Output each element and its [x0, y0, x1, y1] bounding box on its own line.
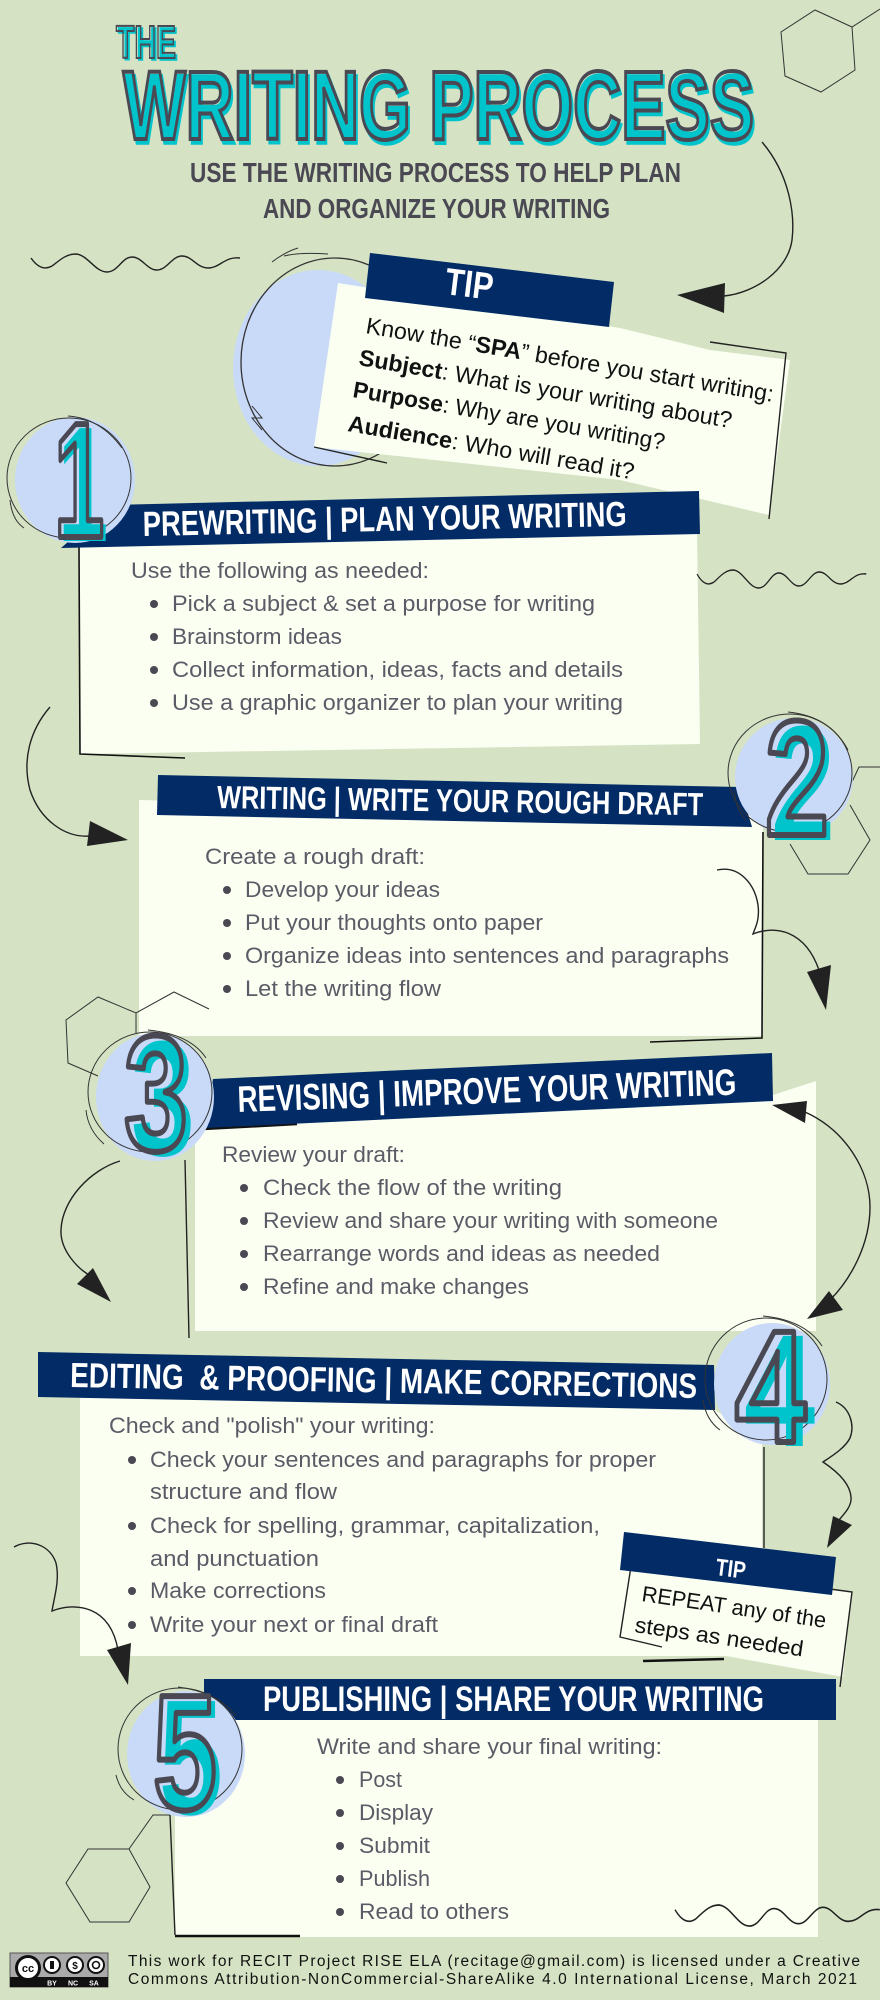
- tip text: Know the “SPA” before you start writing:: [364, 312, 776, 407]
- panel: tip card: [314, 253, 790, 519]
- icon: creative commons badge: BY: [47, 1980, 57, 1988]
- arrow: title to tip: [677, 142, 793, 313]
- number badge 2: 2: [771, 692, 835, 875]
- icon: creative commons badge: cc: [22, 1963, 34, 1975]
- text 4: structure and flow: [150, 1479, 337, 1504]
- icon: creative commons badge: $: [72, 1961, 78, 1972]
- number badge 2: [728, 687, 853, 875]
- icon: creative commons badge: SA: [89, 1980, 99, 1988]
- text 2: Develop your ideas: [245, 877, 440, 902]
- text 1: Use the following as needed:: [131, 558, 429, 583]
- number badge 5: 5: [159, 1666, 223, 1849]
- number badge 1: 1: [58, 394, 108, 577]
- text 5: Submit: [359, 1833, 430, 1858]
- text 3: [222, 1142, 718, 1299]
- license footer text: [128, 1953, 860, 1988]
- icon: hexagon bottom left: [66, 1815, 170, 1922]
- card 4: [80, 1397, 762, 1656]
- text 4: [109, 1413, 656, 1637]
- text 1: [131, 558, 623, 715]
- title: [116, 16, 756, 164]
- icon: creative commons badge: NC: [68, 1980, 78, 1988]
- panel: step 5 publishing: [116, 1661, 836, 1937]
- number badge 1: 1: [54, 390, 104, 573]
- text 5: Display: [359, 1800, 433, 1825]
- tip banner: [365, 253, 614, 327]
- text 5: Read to others: [359, 1899, 509, 1924]
- title word: THE: THE: [118, 18, 178, 70]
- subtitle: [190, 157, 681, 224]
- arrow: step 3 left curve: [61, 1161, 120, 1302]
- arrow: step 2 to step 3: [717, 869, 831, 1010]
- tip banner: TIP: [443, 261, 496, 309]
- heading banner 2: WRITING | WRITE YOUR ROUGH DRAFT: [217, 779, 704, 822]
- panel: step 3 revising: [86, 1002, 816, 1338]
- tip text small: REPEAT any of the: [640, 1581, 828, 1633]
- subtitle: USE THE WRITING PROCESS TO HELP PLAN: [190, 157, 681, 188]
- text 2: Let the writing flow: [245, 976, 441, 1001]
- text 2: [205, 844, 729, 1001]
- card 1: [79, 530, 700, 754]
- tip text: Subject: What is your writing about?: [357, 344, 734, 433]
- tip text: Audience: Who will read it?: [346, 410, 636, 484]
- text 1: Use a graphic organizer to plan your writing: [172, 690, 623, 715]
- icon: hexagon right of step 2: [790, 767, 880, 874]
- text 1: Collect information, ideas, facts and details: [172, 657, 623, 682]
- license footer text: Commons Attribution-NonCommercial-ShareAlike 4.0 International License, March 2021: [128, 1971, 857, 1988]
- icon: hexagon top right: [781, 9, 880, 92]
- wave decoration right: [697, 570, 866, 588]
- icon: creative commons badge: [10, 1953, 108, 1988]
- text 4: Check your sentences and paragraphs for proper: [150, 1447, 656, 1472]
- text 1: Brainstorm ideas: [172, 624, 342, 649]
- text 5: [317, 1734, 662, 1924]
- card 2: [139, 800, 763, 1036]
- tip banner small: TIP: [714, 1554, 747, 1585]
- text 1: Pick a subject & set a purpose for writing: [172, 591, 595, 616]
- tip text: Purpose: Why are you writing?: [351, 376, 667, 455]
- number badge 5: [116, 1661, 245, 1849]
- card 3: [195, 1081, 816, 1331]
- heading banner 2: [157, 775, 752, 827]
- text 2: Create a rough draft:: [205, 844, 425, 869]
- text 5: Publish: [359, 1866, 430, 1891]
- panel: step 1 prewriting: [7, 390, 700, 758]
- text 2: Organize ideas into sentences and paragraphs: [245, 943, 729, 968]
- text 3: Rearrange words and ideas as needed: [263, 1241, 660, 1266]
- subtitle: AND ORGANIZE YOUR WRITING: [263, 193, 610, 224]
- heading banner 3: [205, 1053, 773, 1128]
- text 3: Refine and make changes: [263, 1274, 529, 1299]
- text 4: Write your next or final draft: [150, 1612, 438, 1637]
- title word: THE: THE: [116, 16, 176, 68]
- panel: step 4 editing: [38, 1297, 830, 1656]
- number badge 4: 4: [744, 1301, 815, 1480]
- text 5: Write and share your final writing:: [317, 1734, 662, 1759]
- number badge 1: [7, 390, 135, 577]
- arrow: double headed right: [772, 1101, 870, 1319]
- text 4: Make corrections: [150, 1578, 326, 1603]
- tip text small: steps as needed: [633, 1612, 805, 1661]
- title word: THE: [116, 16, 178, 70]
- text 3: Check the flow of the writing: [263, 1175, 562, 1200]
- heading banner 4: EDITING & PROOFING | MAKE CORRECTIONS: [70, 1356, 697, 1406]
- tip text small: [633, 1581, 828, 1661]
- text 3: Review and share your writing with someone: [263, 1208, 718, 1233]
- number badge 4: [703, 1297, 830, 1480]
- panel: repeat tip: [620, 1532, 852, 1687]
- arrow: step 1 to step 2: [27, 707, 128, 846]
- tip banner small: [620, 1532, 836, 1595]
- number badge 4: 4: [735, 1297, 806, 1476]
- number badge 3: 3: [124, 1002, 188, 1185]
- license footer text: This work for RECIT Project RISE ELA (recitage@gmail.com) is licensed under a Creative: [128, 1953, 860, 1970]
- panel: step 2 writing: [139, 687, 853, 1042]
- number badge 2: 2: [765, 687, 829, 870]
- number badge 5: 5: [153, 1661, 217, 1844]
- wave decoration bottom: [675, 1905, 880, 1926]
- arrow: step 4 to step 5: [14, 1543, 131, 1685]
- wave decoration left: [31, 254, 240, 272]
- text 4: Check and "polish" your writing:: [109, 1413, 435, 1438]
- arrow: step 4 to tip: [823, 1402, 852, 1548]
- text 5: Post: [359, 1767, 402, 1792]
- number badge 3: 3: [131, 1007, 195, 1190]
- tip circle: [233, 248, 429, 466]
- number badge 3: [86, 1002, 214, 1190]
- text 4: Check for spelling, grammar, capitalization,: [150, 1513, 600, 1538]
- heading banner 1: PREWRITING | PLAN YOUR WRITING: [142, 495, 627, 544]
- text 2: Put your thoughts onto paper: [245, 910, 543, 935]
- icon: hexagons left of step 3: [66, 992, 209, 1076]
- card 5: [175, 1720, 818, 1937]
- text 3: Review your draft:: [222, 1142, 405, 1167]
- tip text: [346, 312, 776, 484]
- text 4: and punctuation: [150, 1546, 319, 1571]
